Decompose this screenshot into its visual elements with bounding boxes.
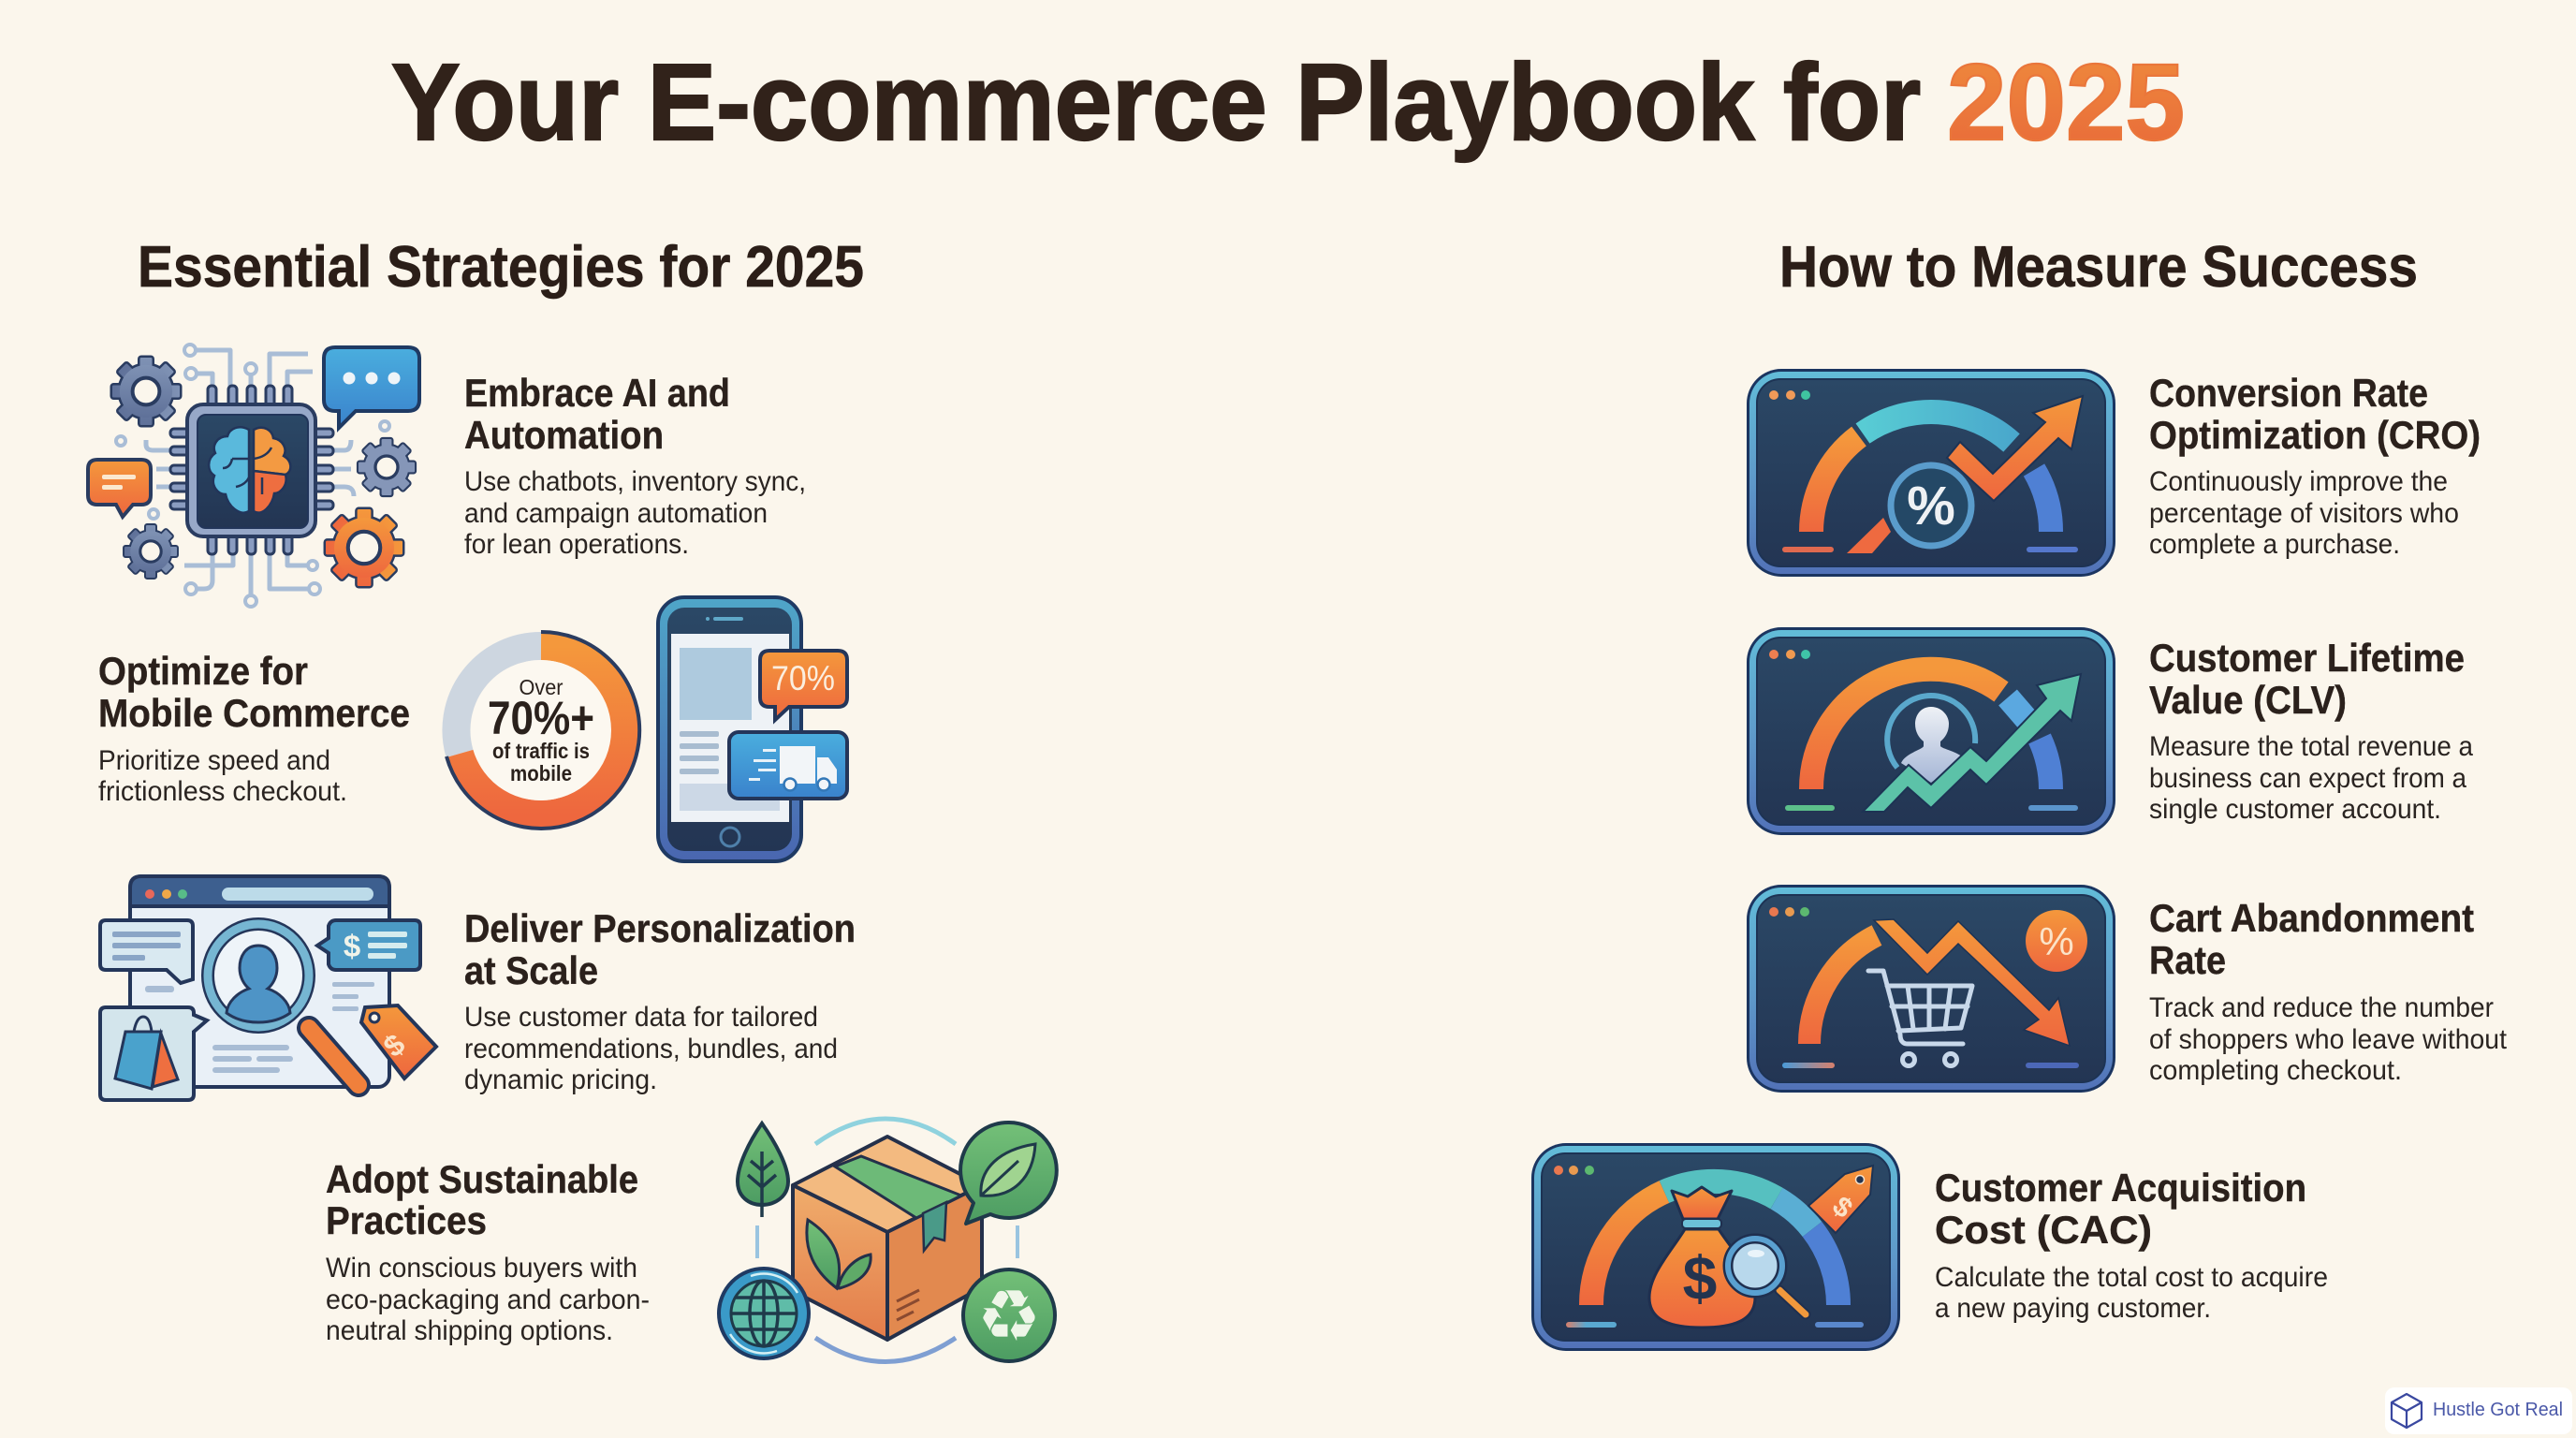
icon: eco package with leaf, globe and recycling	[719, 1119, 1057, 1361]
text: embrace AI: and campaign automation	[464, 498, 768, 529]
text: deliver personalization: Deliver Personalization	[464, 906, 856, 950]
text: customer acquisition cost: a new paying customer.	[1935, 1293, 2211, 1324]
heading: essential strategies: Essential Strategies for 2025	[138, 235, 864, 300]
text: cart abandonment rate: Cart Abandonment	[2149, 896, 2474, 940]
text: conversion rate optimization: percentage of visitors who	[2149, 498, 2459, 529]
chart: mobile traffic donut	[446, 632, 639, 829]
text: cart abandonment rate	[2149, 896, 2508, 1086]
text: customer acquisition cost	[1935, 1166, 2328, 1324]
text: adopt sustainable practices: neutral shipping options.	[326, 1315, 613, 1346]
chart: mobile traffic donut: 70%+	[488, 692, 594, 744]
text: deliver personalization: recommendations, bundles, and	[464, 1034, 838, 1064]
title: 2025	[1947, 41, 2185, 163]
text: customer acquisition cost: Calculate the total cost to acquire	[1935, 1262, 2328, 1293]
icon: smartphone with delivery truck	[658, 597, 847, 861]
text: adopt sustainable practices: Adopt Sustainable	[326, 1157, 638, 1201]
text: deliver personalization: Use customer data for tailored	[464, 1002, 818, 1033]
text: cart abandonment rate: of shoppers who leave without	[2149, 1024, 2508, 1055]
text: deliver personalization	[464, 906, 856, 1095]
text: adopt sustainable practices: Win conscious buyers with	[326, 1253, 637, 1284]
watermark badge: Hustle Got Real	[2433, 1400, 2563, 1420]
text: embrace AI	[464, 371, 806, 560]
text: conversion rate optimization	[2149, 371, 2481, 560]
text: customer lifetime value: single customer account.	[2149, 794, 2441, 825]
chart: mobile traffic donut: mobile	[510, 761, 572, 785]
title: Your E-commerce Playbook for	[391, 41, 1921, 163]
watermark badge	[2385, 1387, 2572, 1434]
chart: mobile traffic donut: of traffic is	[492, 739, 590, 763]
text: optimize for mobile: frictionless checkout.	[98, 776, 347, 807]
text: adopt sustainable practices	[326, 1157, 650, 1346]
panel: cart abandonment dashboard: %	[2039, 919, 2074, 963]
text: embrace AI: Embrace AI and	[464, 371, 730, 415]
heading: how to measure success: How to Measure Success	[1779, 235, 2418, 300]
text: customer lifetime value: Value (CLV)	[2149, 678, 2347, 722]
text: adopt sustainable practices: eco-packaging and carbon-	[326, 1284, 650, 1315]
panel: conversion rate dashboard: %	[1907, 476, 1955, 536]
text: optimize for mobile: Mobile Commerce	[98, 691, 410, 735]
text: customer acquisition cost: Cost (CAC)	[1935, 1208, 2152, 1252]
text: cart abandonment rate: completing checkout.	[2149, 1055, 2402, 1086]
panel: cart abandonment dashboard	[1747, 885, 2115, 1093]
text: conversion rate optimization: Continuously improve the	[2149, 466, 2448, 497]
text: adopt sustainable practices: Practices	[326, 1198, 487, 1242]
text: optimize for mobile: Optimize for	[98, 649, 308, 693]
icon: AI chip with gears and chat bubbles	[88, 345, 419, 607]
text: deliver personalization: dynamic pricing.	[464, 1064, 657, 1095]
panel: customer acquisition cost dashboard: $	[1683, 1243, 1717, 1313]
text: conversion rate optimization: Optimization (CRO)	[2149, 413, 2481, 457]
text: customer lifetime value: business can expect from a	[2149, 763, 2466, 794]
panel: customer lifetime value dashboard	[1747, 627, 2115, 835]
text: deliver personalization: at Scale	[464, 948, 598, 992]
text: embrace AI: for lean operations.	[464, 529, 689, 560]
icon: smartphone with delivery truck: 70%	[771, 659, 835, 697]
panel: customer acquisition cost dashboard: $	[1826, 1191, 1858, 1225]
text: embrace AI: Automation	[464, 413, 664, 457]
text: conversion rate optimization: complete a purchase.	[2149, 529, 2400, 560]
text: customer acquisition cost: Customer Acquisition	[1935, 1166, 2306, 1210]
icon: personalization browser with magnifier: $	[377, 1027, 411, 1064]
chart: mobile traffic donut: Over	[519, 675, 564, 699]
text: cart abandonment rate: Track and reduce the number	[2149, 992, 2494, 1023]
text: conversion rate optimization: Conversion Rate	[2149, 371, 2428, 415]
text: customer lifetime value	[2149, 636, 2473, 825]
panel: customer acquisition cost dashboard	[1531, 1143, 1900, 1351]
text: optimize for mobile: Prioritize speed and	[98, 745, 330, 776]
text: cart abandonment rate: Rate	[2149, 938, 2226, 982]
panel: conversion rate dashboard	[1747, 369, 2115, 577]
text: customer lifetime value: Measure the total revenue a	[2149, 731, 2473, 762]
text: optimize for mobile	[98, 649, 410, 807]
text: embrace AI: Use chatbots, inventory sync,	[464, 466, 806, 497]
icon: eco package with leaf, globe and recycling: ♻	[977, 1274, 1041, 1357]
icon: personalization browser with magnifier: $	[344, 929, 360, 963]
icon: personalization browser with magnifier	[100, 876, 436, 1100]
text: customer lifetime value: Customer Lifetime	[2149, 636, 2465, 680]
